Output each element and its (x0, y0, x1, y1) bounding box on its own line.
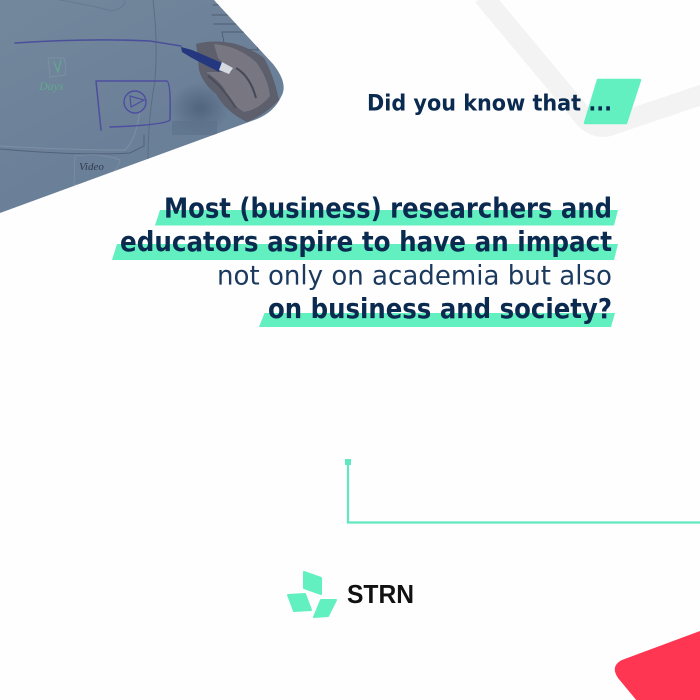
logo mark (288, 572, 336, 617)
whiteboard notes: Days (38, 79, 64, 93)
highlight line 1 (155, 210, 618, 226)
connector line (345, 459, 700, 522)
whiteboard notes: Video (79, 161, 104, 173)
background decorative grey band (483, 0, 700, 127)
line 4: on business and society? (268, 293, 612, 325)
whiteboard notes (38, 79, 104, 173)
highlight line 2 (112, 244, 618, 260)
marker (181, 47, 233, 74)
logo: STRN (288, 572, 414, 617)
red corner shape (615, 631, 700, 700)
hand (196, 42, 279, 122)
line 2: educators aspire to have an impact (120, 226, 612, 258)
photo: hand drawing on whiteboard (0, 0, 300, 220)
highlight line 4 (259, 313, 615, 327)
heading: did you know (367, 80, 640, 123)
did you know text: Did you know that ... (367, 90, 612, 116)
green parallelogram behind ellipsis (585, 80, 640, 123)
line 3: not only on academia but also (217, 260, 612, 292)
main statement (112, 192, 618, 327)
logo wordmark: STRN (347, 579, 414, 609)
line 1: Most (business) researchers and (164, 192, 612, 224)
